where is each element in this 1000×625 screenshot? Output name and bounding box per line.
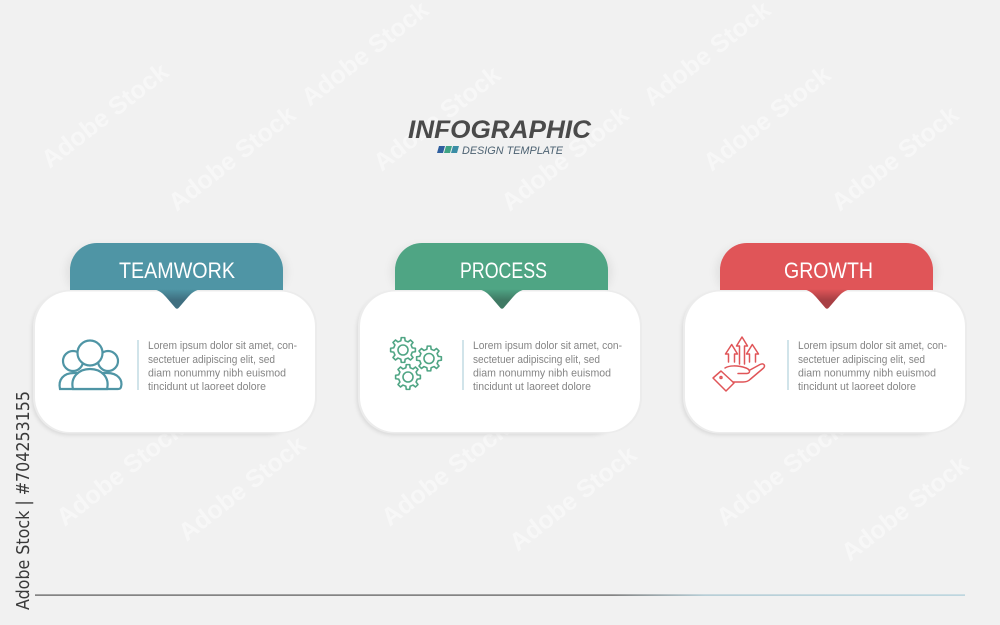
header: teamwork: TEAMWORK bbox=[119, 258, 235, 283]
header: growth: GROWTH bbox=[784, 258, 873, 283]
panel: process bbox=[357, 243, 642, 435]
watermarks: Adobe Stock bbox=[368, 61, 506, 177]
pointer bbox=[478, 289, 526, 309]
panel: growth bbox=[682, 243, 967, 435]
watermarks: Adobe Stock bbox=[504, 441, 642, 557]
subtitle bars bbox=[437, 146, 459, 153]
watermarks: Adobe Stock bbox=[163, 101, 301, 217]
card body bbox=[682, 290, 967, 435]
watermarks: Adobe Stock bbox=[496, 101, 634, 217]
description: Lorem ipsum dolor sit amet, con- bbox=[798, 340, 947, 352]
watermarks: Adobe Stock bbox=[36, 58, 174, 174]
icon: people bbox=[60, 340, 121, 389]
description bbox=[798, 340, 947, 393]
pointer bbox=[803, 289, 851, 309]
watermarks: Adobe Stock bbox=[51, 416, 189, 532]
icon: hand with arrows bbox=[713, 337, 764, 391]
description: diam nonummy nibh euismod bbox=[473, 368, 611, 380]
icon: gears bbox=[391, 338, 441, 389]
header: process bbox=[392, 243, 611, 297]
divider bbox=[138, 340, 139, 390]
bottom rule bbox=[35, 594, 965, 596]
header: teamwork bbox=[67, 243, 286, 297]
card body bbox=[357, 290, 642, 435]
panel: teamwork bbox=[32, 243, 317, 435]
description bbox=[148, 340, 297, 393]
description: sectetuer adipiscing elit, sed bbox=[798, 354, 925, 366]
side stock id text: Adobe Stock | #704253155 bbox=[13, 391, 34, 610]
watermarks: Adobe Stock bbox=[836, 451, 974, 567]
title block bbox=[408, 116, 592, 157]
description: sectetuer adipiscing elit, sed bbox=[473, 354, 600, 366]
card body bbox=[32, 290, 317, 435]
watermarks: Adobe Stock bbox=[376, 416, 514, 532]
pointer bbox=[153, 289, 201, 309]
description: diam nonummy nibh euismod bbox=[798, 368, 936, 380]
subtitle: DESIGN TEMPLATE bbox=[462, 145, 564, 157]
description: sectetuer adipiscing elit, sed bbox=[148, 354, 275, 366]
description: Lorem ipsum dolor sit amet, con- bbox=[473, 340, 622, 352]
description bbox=[473, 340, 622, 393]
description: tincidunt ut laoreet dolore bbox=[473, 381, 591, 393]
description: diam nonummy nibh euismod bbox=[148, 368, 286, 380]
divider bbox=[462, 340, 464, 390]
watermarks: Adobe Stock bbox=[698, 61, 836, 177]
watermarks: Adobe Stock bbox=[826, 101, 964, 217]
description: Lorem ipsum dolor sit amet, con- bbox=[148, 340, 297, 352]
watermarks: Adobe Stock bbox=[711, 416, 849, 532]
title: INFOGRAPHIC bbox=[408, 116, 592, 144]
divider bbox=[788, 340, 789, 390]
watermarks: Adobe Stock bbox=[173, 431, 311, 547]
description: tincidunt ut laoreet dolore bbox=[798, 381, 916, 393]
header: growth bbox=[717, 243, 936, 297]
description: tincidunt ut laoreet dolore bbox=[148, 381, 266, 393]
header: process: PROCESS bbox=[460, 258, 547, 283]
